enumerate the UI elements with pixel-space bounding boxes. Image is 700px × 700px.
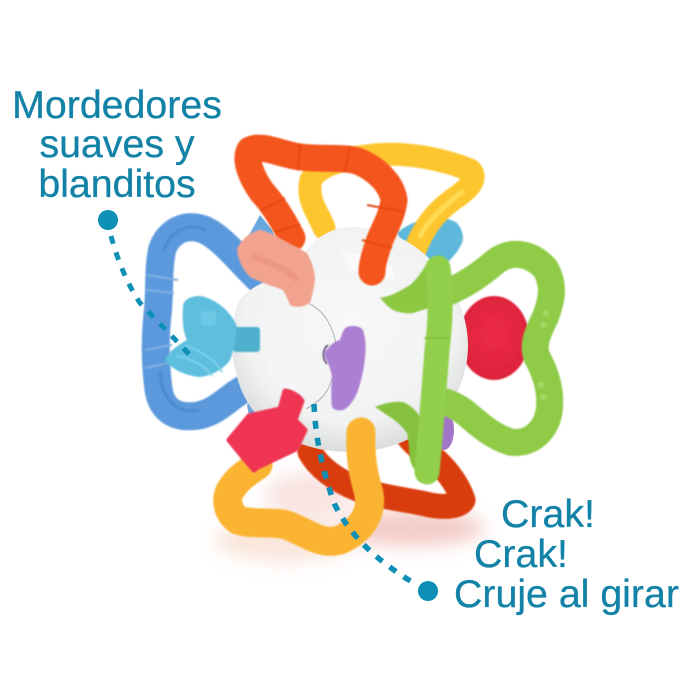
back teether: light blue right — [397, 218, 463, 270]
ball highlight — [340, 250, 396, 280]
back loop: dark orange bottom — [310, 425, 463, 506]
back loop: yellow — [310, 154, 473, 265]
white central ball — [232, 227, 468, 452]
label: mordedores — [12, 83, 222, 206]
front loop: green — [445, 254, 551, 442]
front loop: yellow bottom — [228, 432, 370, 541]
dotted leader: cruje — [314, 404, 438, 601]
teether: light blue heart — [165, 296, 260, 377]
label: crak: Cruje al girar — [454, 572, 679, 616]
label: mordedores: suaves y — [39, 122, 195, 166]
teether: pink — [237, 230, 315, 307]
rotating disc — [306, 304, 336, 409]
teether: red ball — [459, 296, 529, 380]
label: mordedores: Mordedores — [12, 83, 222, 127]
teether: red star — [229, 391, 305, 470]
floor shadow — [215, 473, 485, 562]
front loop: orange top — [248, 144, 405, 272]
dotted leader: mordedores — [98, 210, 190, 355]
back teether: blue top — [248, 215, 280, 262]
front loop: blue — [145, 227, 272, 416]
label: crak — [454, 492, 679, 616]
back teether: blue lower — [247, 390, 280, 422]
teether: purple cloud — [323, 326, 366, 410]
green ring with fins — [375, 263, 449, 473]
back teether: purple — [434, 410, 454, 450]
label: mordedores: blanditos — [38, 162, 196, 206]
label: crak: Crak! — [501, 492, 595, 536]
label: crak: Crak! — [474, 532, 568, 576]
